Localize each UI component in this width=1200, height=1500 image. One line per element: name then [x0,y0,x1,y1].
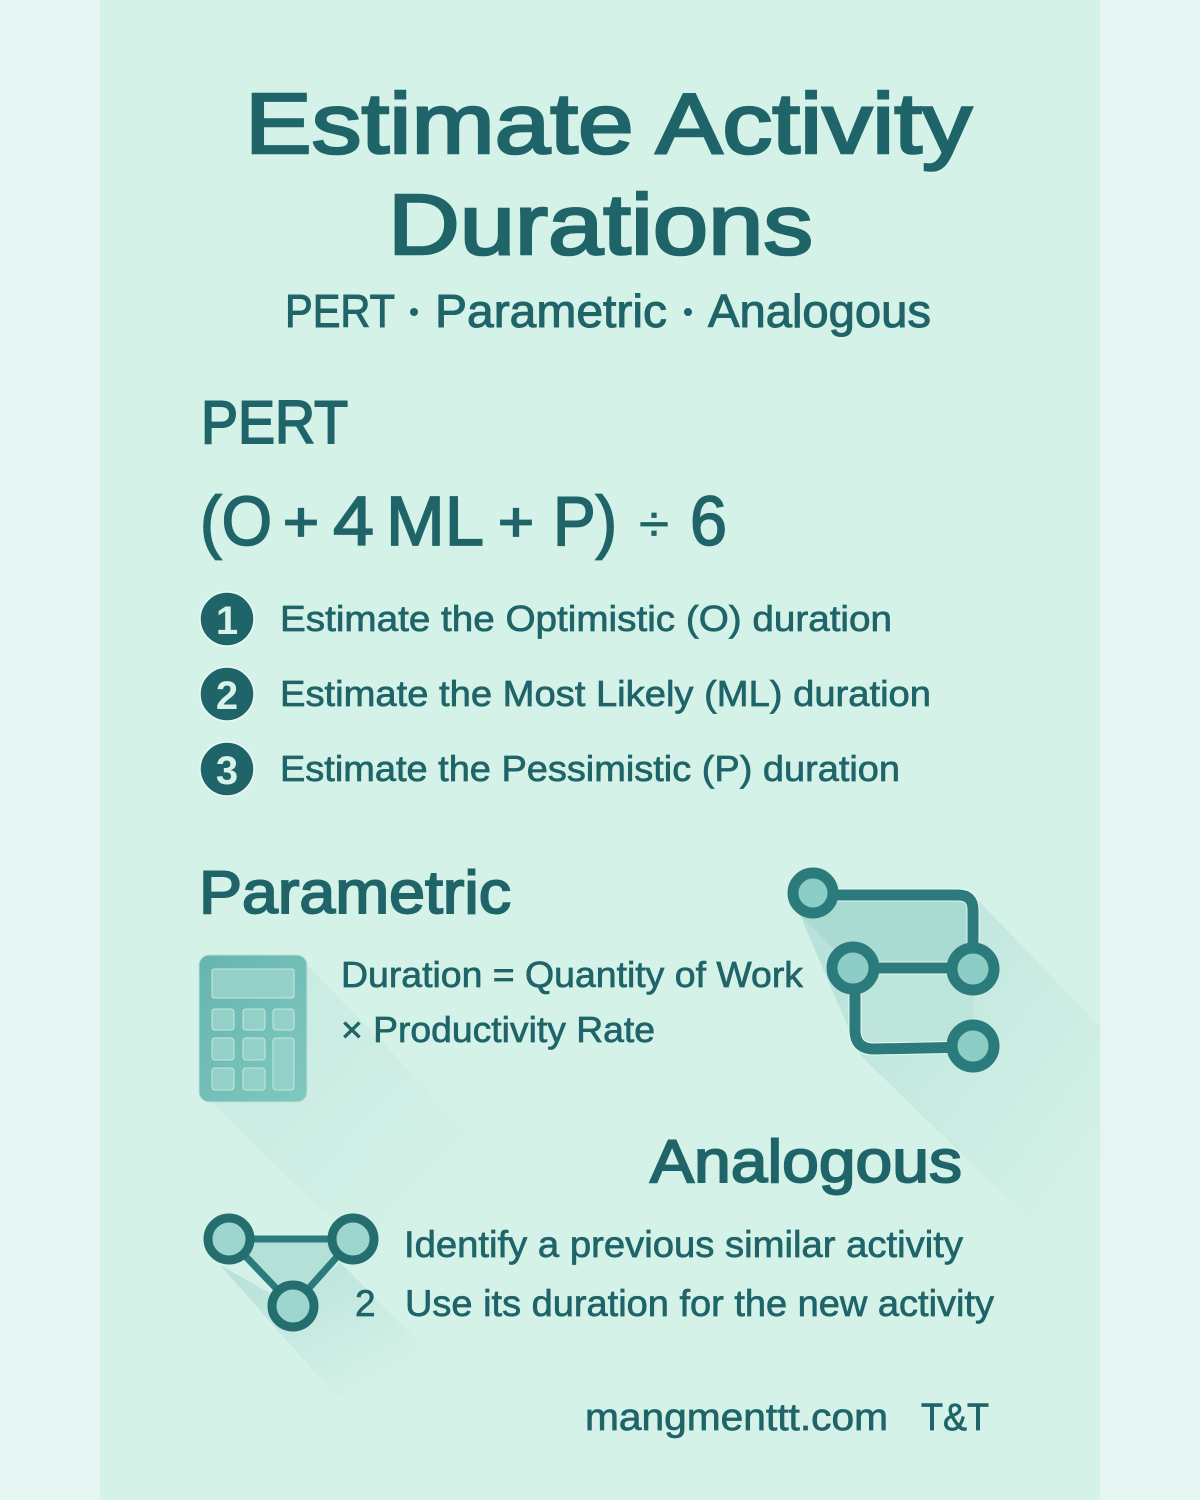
PERT heading: PERT [201,389,348,456]
step 2: 2 [216,674,238,718]
PERT formula: + [498,490,534,553]
step 1: 1 [216,599,238,643]
PERT formula [200,482,727,560]
PERT formula: + [283,490,319,553]
subtitle [285,285,931,337]
footer: mangmenttt.com [585,1397,888,1439]
Parametric formula: Duration = Quantity of Work [341,954,804,995]
step 3: Estimate the Pessimistic (P) duration [280,748,900,789]
subtitle: PERT [285,285,395,337]
icon: calculator [199,955,307,1102]
panel: Parametric [199,859,994,1102]
long shadow: calculator [205,965,560,1340]
step 2: Estimate the Most Likely (ML) duration [280,673,931,714]
long shadow: triangle network [220,1239,470,1395]
PERT formula: (O [200,482,272,560]
step 1: Estimate the Optimistic (O) duration [280,598,892,639]
title: Durations [388,178,813,273]
step 2 [200,667,931,721]
PERT formula: 4 [333,482,374,560]
panel: Analogous [208,1128,995,1327]
subtitle: Parametric [435,285,667,337]
icon: triangle network [208,1218,374,1327]
title [245,77,973,273]
PERT formula: 6 [690,482,727,560]
panel: PERT [200,389,931,796]
PERT formula: P) [553,482,617,560]
Analogous step 2: Use its duration for the new activity [405,1283,995,1324]
step 3 [200,742,900,796]
Parametric heading: Parametric [199,859,511,926]
Parametric formula: × Productivity Rate [341,1009,655,1050]
PERT formula: ML [386,482,484,560]
step 3: 3 [216,749,238,793]
Parametric formula [341,954,804,1050]
icon: network flow [793,873,994,1067]
subtitle: Analogous [708,285,931,337]
footer: T&T [921,1397,989,1439]
Analogous step 1: Identify a previous similar activity [404,1224,964,1265]
step 1 [200,592,892,646]
title: Estimate Activity [245,77,973,172]
PERT formula: ÷ [639,496,669,552]
Analogous step 2: 2 [355,1283,376,1324]
Analogous heading: Analogous [650,1128,962,1195]
long shadow: network icon [800,893,1100,1300]
